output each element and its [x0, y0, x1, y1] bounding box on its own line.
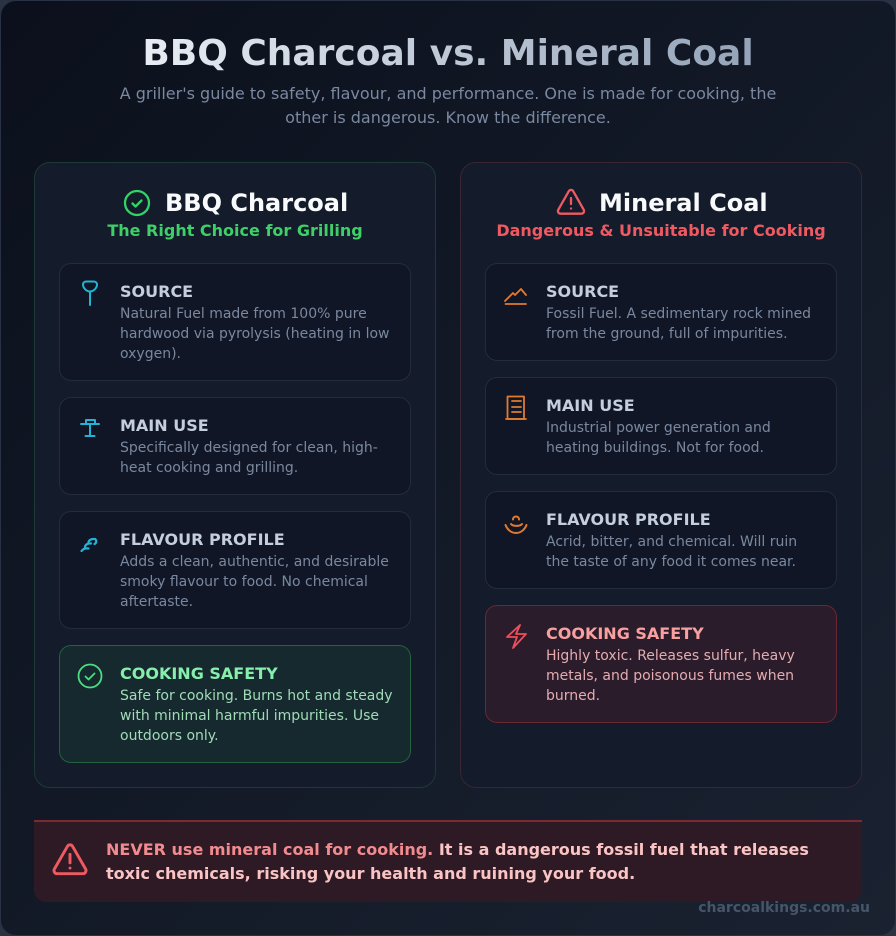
card: flavour profile: [485, 491, 837, 589]
description: heat cooking and grilling.: [120, 460, 298, 476]
title: BBQ Charcoal vs. Mineral Coal: [142, 33, 754, 74]
description: [120, 440, 378, 476]
description: hardwood via pyrolysis (heating in low: [120, 326, 390, 342]
icon: mountains: [504, 288, 527, 305]
description: Acrid, bitter, and chemical. Will ruin: [546, 534, 797, 550]
icon: lightning bolt: [506, 624, 527, 649]
icon: smoke: [80, 538, 98, 552]
card: flavour profile: [59, 511, 411, 629]
description: outdoors only.: [120, 728, 219, 744]
panel heading: BBQ Charcoal: [165, 189, 348, 217]
icon: warning triangle: [52, 843, 88, 876]
card: cooking safety: [59, 645, 411, 763]
icon: green check circle: [124, 190, 150, 216]
subtitle: A griller's guide to safety, flavour, and performance. One is made for cooking, the: [120, 84, 776, 103]
heading: FLAVOUR PROFILE: [546, 510, 711, 529]
panel heading: Mineral Coal: [599, 189, 768, 217]
icon: bitter face: [504, 516, 528, 534]
description: metals, and poisonous fumes when: [546, 668, 794, 684]
card: main use: [59, 397, 411, 495]
description: heating buildings. Not for food.: [546, 440, 764, 456]
heading: MAIN USE: [546, 396, 635, 415]
description: Industrial power generation and: [546, 420, 771, 436]
banner text: NEVER use mineral coal for cooking. It is a dangerous fossil fuel that releases: [106, 840, 809, 859]
description: [546, 648, 795, 704]
description: the taste of any food it comes near.: [546, 554, 796, 570]
heading: MAIN USE: [120, 416, 209, 435]
banner text: [106, 840, 809, 883]
heading: SOURCE: [120, 282, 193, 301]
heading: FLAVOUR PROFILE: [120, 530, 285, 549]
icon: industrial building: [505, 396, 527, 420]
description: [120, 554, 389, 610]
description: Safe for cooking. Burns hot and steady: [120, 688, 393, 704]
subtitle: other is dangerous. Know the difference.: [285, 108, 611, 127]
heading: COOKING SAFETY: [546, 624, 704, 643]
description: aftertaste.: [120, 594, 193, 610]
card: source: [59, 263, 411, 381]
description: Natural Fuel made from 100% pure: [120, 306, 367, 322]
description: burned.: [546, 688, 600, 704]
description: from the ground, full of impurities.: [546, 326, 788, 342]
icon: warning triangle: [556, 188, 586, 215]
description: oxygen).: [120, 346, 181, 362]
subtitle: [120, 84, 776, 127]
warning banner: [34, 820, 862, 902]
panel: mineral coal: [460, 162, 862, 788]
icon: check circle: [78, 664, 102, 688]
panel: BBQ charcoal: [34, 162, 436, 788]
card: main use: [485, 377, 837, 475]
description: [546, 306, 811, 342]
icon: grill: [80, 419, 100, 437]
description: Specifically designed for clean, high-: [120, 440, 378, 456]
card: source: [485, 263, 837, 361]
card: cooking safety: [485, 605, 837, 723]
description: Highly toxic. Releases sulfur, heavy: [546, 648, 795, 664]
description: Adds a clean, authentic, and desirable: [120, 554, 389, 570]
description: with minimal harmful impurities. Use: [120, 708, 379, 724]
panel subheading: Dangerous & Unsuitable for Cooking: [496, 221, 826, 240]
description: Fossil Fuel. A sedimentary rock mined: [546, 306, 811, 322]
banner text: toxic chemicals, risking your health and ruining your food.: [106, 864, 635, 883]
description: [120, 688, 393, 744]
icon: grill brush: [82, 280, 98, 306]
description: [120, 306, 390, 362]
description: [546, 420, 771, 456]
heading: SOURCE: [546, 282, 619, 301]
panel subheading: The Right Choice for Grilling: [107, 221, 363, 240]
description: [546, 534, 797, 570]
heading: COOKING SAFETY: [120, 664, 278, 683]
description: smoky flavour to food. No chemical: [120, 574, 368, 590]
footer url: charcoalkings.com.au: [698, 900, 870, 916]
